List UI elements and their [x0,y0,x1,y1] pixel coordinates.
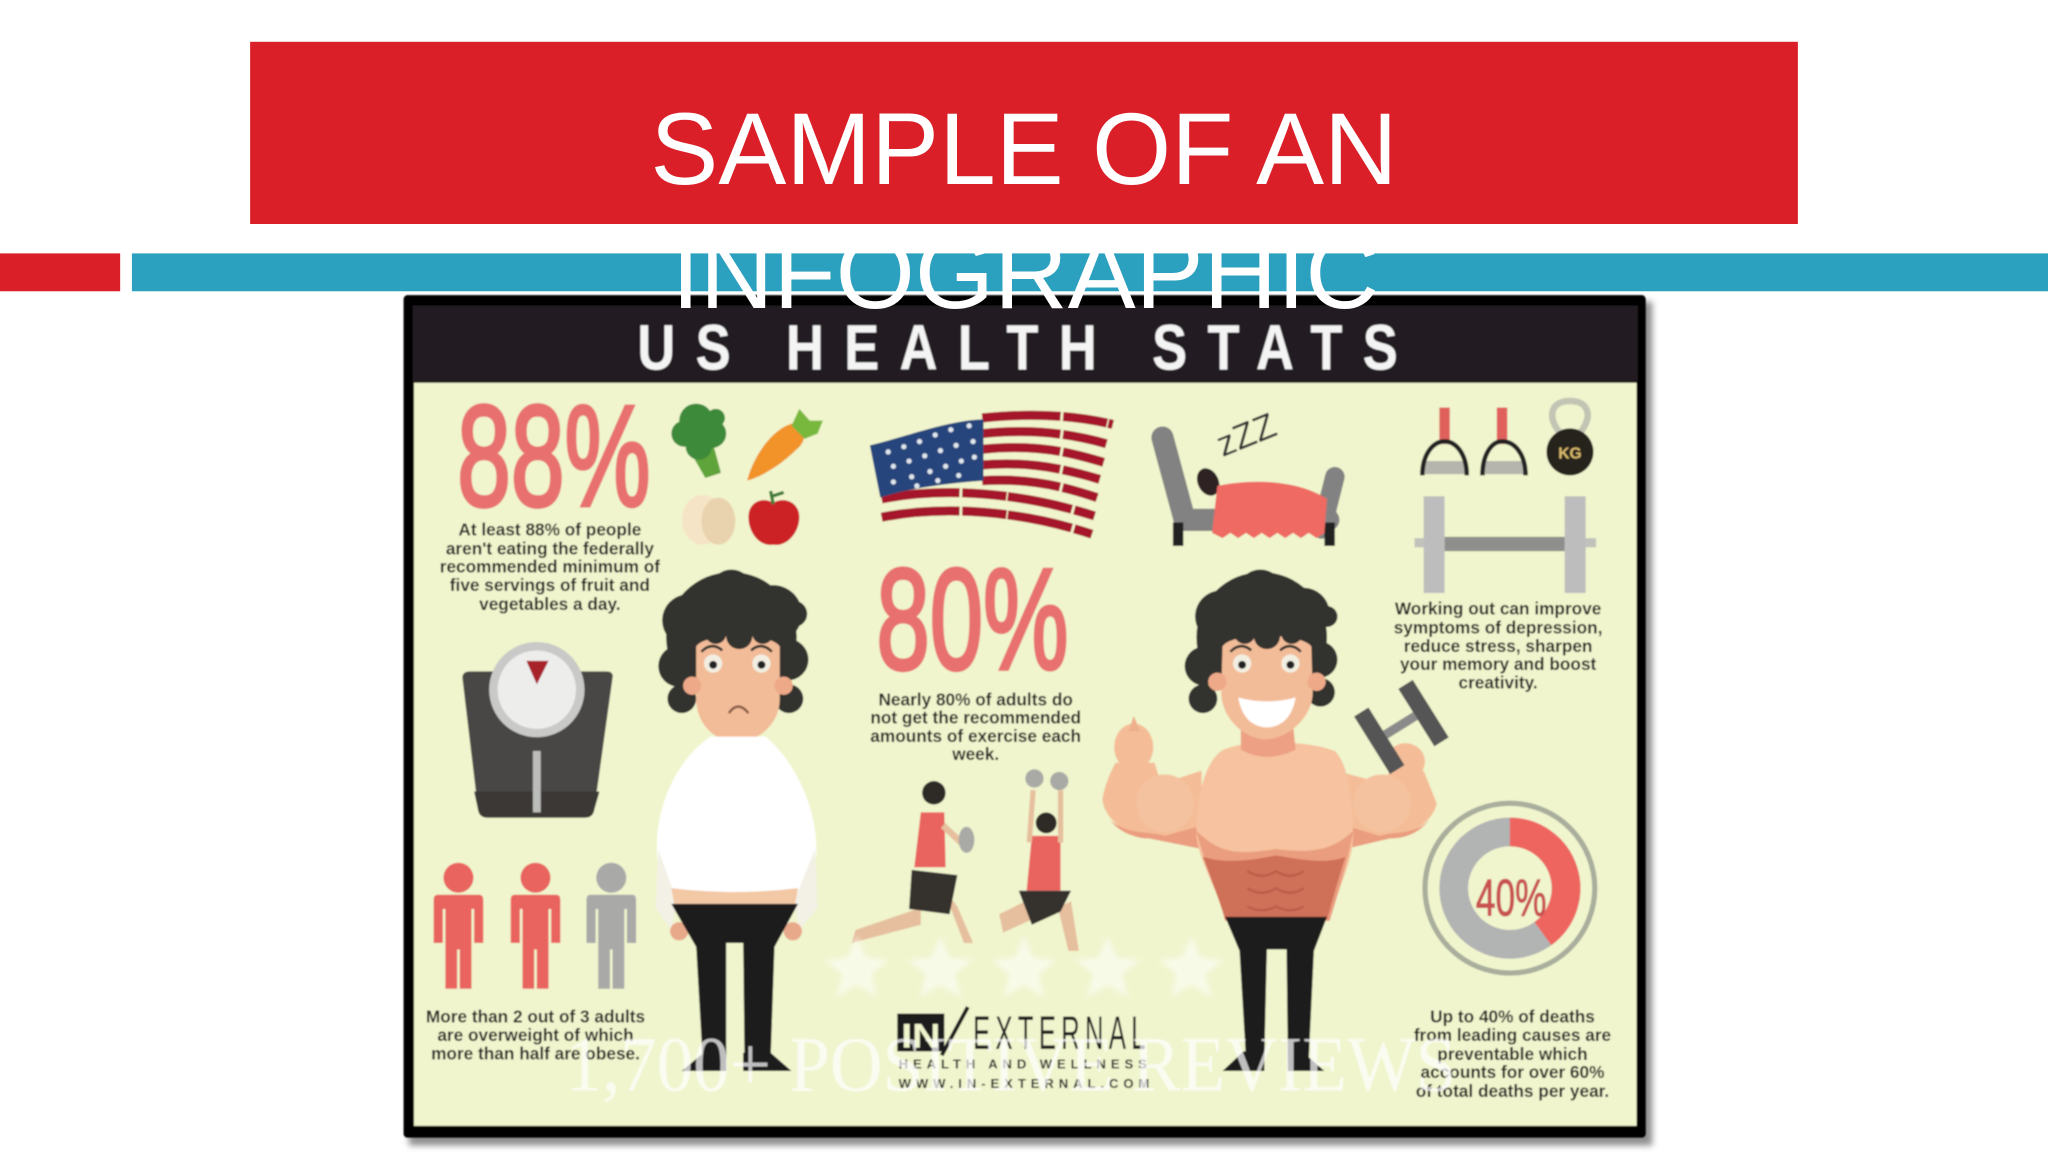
text: workout caption: Working out can improve [1395,599,1601,619]
text: overweight caption: are overweight of which [437,1025,634,1045]
icon: barbell [1415,496,1596,593]
text: overweight caption [426,1007,645,1063]
icon: bed with sleeper [1162,406,1335,546]
icon: pull handles and kettlebell [1422,401,1593,475]
stat: 88%: 88% [457,376,650,536]
logo: In/External: HEALTH AND WELLNESS [899,1056,1147,1071]
shoes [1223,1051,1324,1071]
icon: exercising figures [852,769,1079,951]
poster heading: US HEALTH STATS [637,313,1398,384]
smile [1238,697,1296,728]
character: overweight man [656,569,818,1071]
character: muscular man [1102,569,1449,1071]
text: 88% caption: vegetables a day. [479,594,621,614]
text: deaths caption: accounts for over 60% [1421,1062,1604,1082]
fists [1114,724,1153,771]
title text: SAMPLE OF AN [650,92,1398,206]
text: overweight caption: more than half are obese. [431,1043,640,1063]
logo: In/External: EXTERNAL [973,1008,1145,1060]
neck [1241,725,1296,757]
stat: 80%: 80% [876,540,1068,700]
accent bar: blue [132,253,2048,291]
text: 88% caption: five servings of fruit and [450,575,650,595]
icon: broccoli [671,404,726,478]
hair [1185,569,1337,713]
face [696,636,780,742]
icon: three adult figures [434,863,636,989]
icon: onion [682,495,735,545]
belly [671,888,798,909]
poster shadow [409,302,1652,1145]
text: deaths caption: from leading causes are [1414,1025,1611,1045]
icon: bed with sleeper: zZZ [1211,406,1282,465]
text: deaths caption: of total deaths per year. [1416,1081,1609,1101]
logo: In/External [897,1007,1149,1091]
hair [658,569,808,713]
text: workout caption: creativity. [1459,672,1538,692]
text: 80% caption: not get the recommended [870,708,1081,728]
text: 88% caption: recommended minimum of [440,557,660,577]
watermark text: 1,700+ POSITIVE REVIEWS [566,1021,1456,1108]
text: 88% caption [440,520,660,614]
abs [1203,856,1345,920]
icon: donut chart 40%: 40% [1476,870,1546,928]
title banner [250,42,1798,224]
icon: American flag [870,415,1113,534]
poster background [414,383,1637,1126]
poster header band [413,306,1638,381]
man with raised dumbbells [999,769,1079,951]
lunging man [852,781,974,943]
text: 88% caption: At least 88% of people [458,520,641,540]
text: deaths caption [1414,1007,1611,1101]
trousers [1225,917,1327,1061]
icon: donut chart 40% [1425,803,1595,973]
watermark stars [824,935,1224,998]
text: 88% caption: aren't eating the federally [446,538,654,558]
dumbbell [1354,680,1449,774]
logo: In/External: WWW.IN-EXTERNAL.COM [899,1076,1149,1091]
text: 80% caption: amounts of exercise each [870,726,1081,746]
logo: In/External: IN [901,1018,940,1056]
text: 80% caption: Nearly 80% of adults do [878,689,1073,709]
arms [1102,763,1202,849]
accent bar: red [0,253,120,291]
text: deaths caption: Up to 40% of deaths [1430,1007,1595,1027]
text: overweight caption: More than 2 out of 3 adults [426,1007,645,1027]
title text: INFOGRAPHIC [672,216,1379,330]
text: workout caption: symptoms of depression, [1394,617,1603,637]
body [657,737,816,901]
face [1221,636,1313,739]
icon: bathroom scale [462,642,613,818]
icon: apple [748,491,799,545]
text: 80% caption [870,689,1081,764]
poster frame [404,295,1646,1138]
icon: pull handles and kettlebell: KG [1558,445,1582,462]
text: workout caption: your memory and boost [1400,654,1597,674]
text: deaths caption: preventable which [1437,1044,1588,1064]
trousers [671,904,798,1061]
text: 80% caption: week. [951,744,999,764]
shoes [682,1051,792,1071]
poster: US health stats [404,295,1646,1138]
icon: carrot [747,409,823,481]
text: workout caption [1394,599,1603,692]
torso [1196,742,1353,921]
title text [650,92,1398,330]
text: workout caption: reduce stress, sharpen [1404,636,1592,656]
